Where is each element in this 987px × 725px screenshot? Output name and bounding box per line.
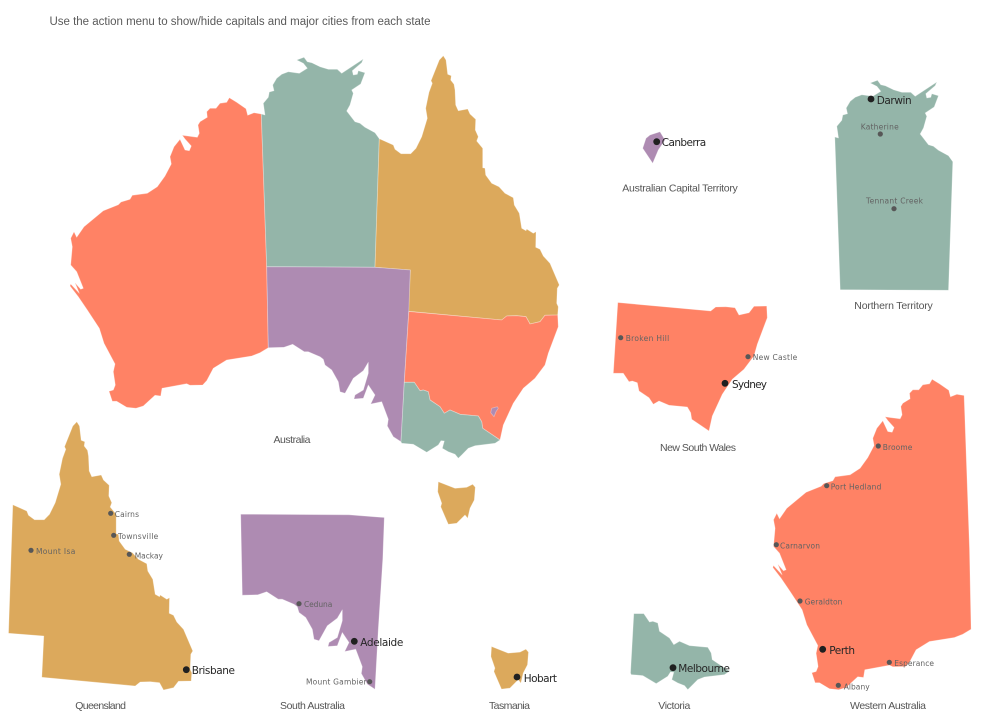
state: Australian Capital Territory bbox=[491, 407, 498, 417]
city: Katherine: Katherine bbox=[861, 122, 899, 132]
state: New South Wales bbox=[404, 312, 558, 440]
label: Western Australia: Western Australia bbox=[850, 700, 926, 712]
city: Townsville: Townsville bbox=[117, 532, 159, 541]
city: Mackay: Mackay bbox=[135, 551, 164, 560]
label: South Australia: South Australia bbox=[280, 700, 345, 712]
panel: Australian Capital Territory inset bbox=[622, 132, 739, 194]
city: Tennant Creek: Tennant Creek bbox=[865, 196, 924, 206]
map: Northern Territory bbox=[835, 80, 953, 290]
city: Cairns: Cairns bbox=[115, 510, 139, 519]
panel: Victoria inset bbox=[630, 614, 730, 712]
city: Mount Isa: Mount Isa bbox=[36, 547, 75, 556]
map: Western Australia bbox=[773, 379, 971, 690]
label: Victoria: Victoria bbox=[658, 700, 690, 712]
city: Carnarvon: Carnarvon bbox=[780, 542, 820, 551]
city: Darwin: Darwin bbox=[877, 95, 912, 107]
city: Hobart: Hobart bbox=[524, 673, 557, 685]
map: Victoria bbox=[630, 614, 730, 690]
city: Perth: Perth bbox=[829, 645, 855, 657]
city: Esperance: Esperance bbox=[894, 659, 934, 668]
panel: South Australia inset bbox=[241, 514, 403, 712]
label: New South Wales: New South Wales bbox=[660, 442, 736, 454]
panel: Tasmania inset bbox=[489, 646, 557, 712]
label: Australian Capital Territory: Australian Capital Territory bbox=[622, 182, 739, 194]
title instruction text: Use the action menu to show/hide capitals and major cities from each state bbox=[50, 16, 430, 28]
map: Tasmania bbox=[491, 646, 528, 689]
city: Canberra: Canberra bbox=[662, 137, 706, 149]
city: Albany: Albany bbox=[844, 682, 870, 691]
map: New South Wales bbox=[613, 302, 767, 431]
city: Brisbane: Brisbane bbox=[192, 665, 235, 677]
city: Adelaide: Adelaide bbox=[360, 637, 403, 649]
label: Queensland: Queensland bbox=[75, 700, 126, 712]
map: South Australia bbox=[241, 514, 384, 689]
city: Melbourne: Melbourne bbox=[678, 663, 730, 675]
panel: New South Wales inset bbox=[613, 302, 798, 454]
panel: Western Australia inset bbox=[773, 379, 971, 712]
city: Broken Hill: Broken Hill bbox=[626, 334, 669, 343]
state: Western Australia bbox=[70, 98, 268, 408]
city: Sydney: Sydney bbox=[732, 379, 767, 391]
state: Victoria bbox=[401, 382, 500, 458]
label: Australia: Australia bbox=[274, 434, 311, 446]
state: South Australia bbox=[267, 267, 410, 442]
map: ACT bbox=[643, 132, 665, 163]
state: Tasmania bbox=[438, 482, 475, 524]
city: Katherine bbox=[861, 122, 899, 137]
city: Port Hedland: Port Hedland bbox=[831, 482, 882, 492]
panel: Northern Territory inset bbox=[835, 80, 953, 312]
state: Queensland bbox=[375, 56, 559, 324]
city: New Castle: New Castle bbox=[753, 353, 798, 362]
state: Northern Territory bbox=[261, 57, 379, 267]
city: Tennant Creek bbox=[865, 196, 924, 211]
label: Tasmania: Tasmania bbox=[489, 700, 530, 712]
panel: Queensland inset bbox=[8, 422, 235, 712]
city: Mount Gambier: Mount Gambier bbox=[306, 678, 368, 686]
city: Geraldton: Geraldton bbox=[805, 598, 843, 607]
map: Queensland bbox=[8, 422, 193, 690]
panel: Australia whole map bbox=[70, 56, 559, 524]
city: Ceduna: Ceduna bbox=[304, 600, 332, 609]
label: Northern Territory: Northern Territory bbox=[854, 300, 934, 312]
city: Broome: Broome bbox=[883, 443, 913, 452]
